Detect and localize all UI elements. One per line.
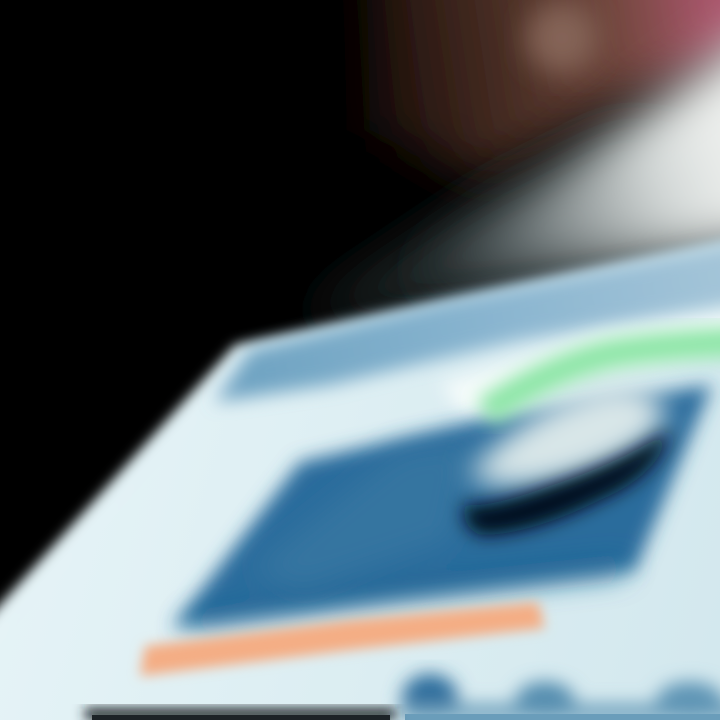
tan highlight — [526, 2, 598, 74]
pale oval on card — [468, 385, 665, 486]
blue card panel — [172, 385, 712, 628]
dark bar at bottom edge — [85, 708, 395, 720]
paper sheet fill to the frame edges — [0, 270, 720, 720]
dark bar base along bottom edge — [92, 715, 390, 720]
card shading — [180, 440, 630, 630]
blue base along bottom edge — [405, 714, 720, 720]
dim haze below the sheen — [300, 130, 720, 320]
green arc — [485, 340, 720, 412]
white sheen of device — [410, 0, 720, 280]
dark shadow under oval — [464, 430, 670, 535]
blue bumps at bottom — [400, 674, 720, 720]
blue strip along upper edge of sheet — [215, 230, 720, 402]
reddish glow, top right — [370, 0, 720, 180]
orange bar — [140, 602, 545, 676]
white band below strip — [440, 305, 720, 420]
paper sheet — [0, 225, 720, 720]
